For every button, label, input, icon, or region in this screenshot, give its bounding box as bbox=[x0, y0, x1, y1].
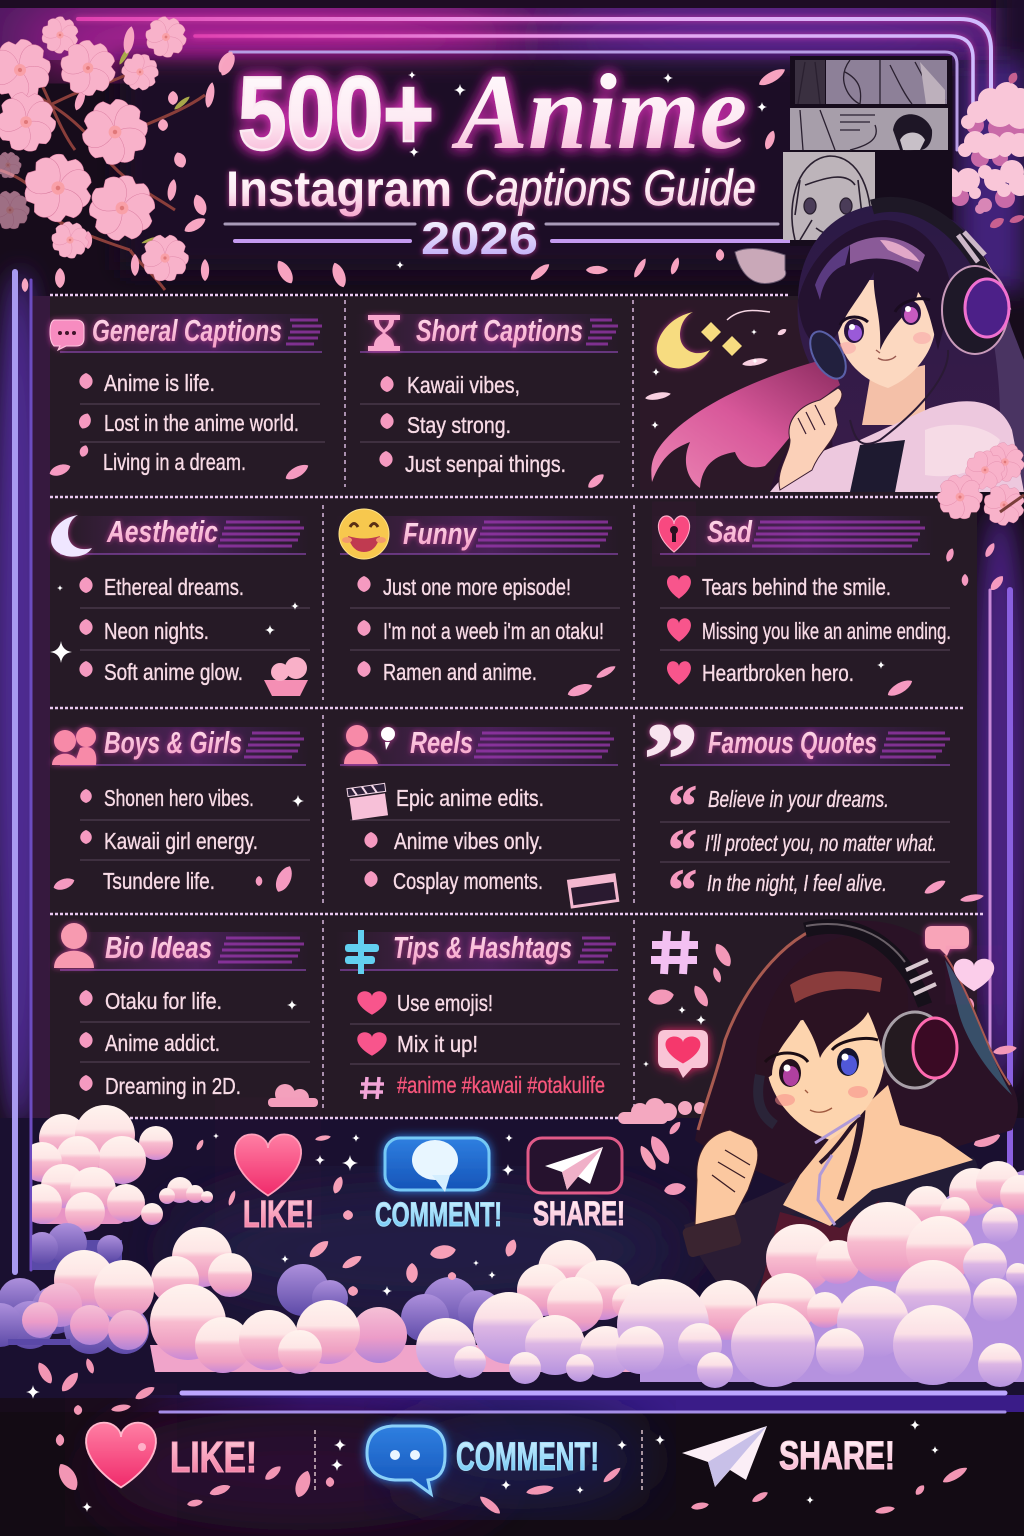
icon: speech bubble bbox=[50, 320, 84, 350]
panel: Aesthetic bbox=[50, 514, 308, 696]
icon: bowl bbox=[264, 657, 308, 696]
eyes bbox=[765, 1038, 878, 1112]
heading: Tips & Hashtags bbox=[393, 930, 572, 965]
caption: Soft anime glow. bbox=[104, 659, 243, 685]
caption: Kawaii vibes, bbox=[407, 372, 520, 398]
icon: person bbox=[54, 923, 94, 968]
panel: Reels bbox=[344, 725, 618, 907]
caption bbox=[667, 618, 951, 644]
caption: Neon nights. bbox=[104, 618, 209, 644]
caption with clapperboard bbox=[347, 783, 544, 820]
right domes bbox=[766, 1161, 1024, 1292]
pink chat bubble bbox=[925, 926, 969, 956]
caption bbox=[380, 412, 511, 438]
hashtags bbox=[360, 1072, 605, 1099]
share: SHARE! bbox=[779, 1434, 895, 1478]
heading: Bio Ideas bbox=[105, 930, 212, 965]
headset bbox=[803, 204, 1009, 444]
caption: Believe in your dreams. bbox=[708, 786, 889, 812]
title petals and stars bbox=[218, 52, 787, 289]
like: LIKE! bbox=[170, 1433, 257, 1482]
subtitle line: Instagram bbox=[226, 161, 452, 217]
caption: Kawaii girl energy. bbox=[104, 828, 258, 854]
pink cloudlet bbox=[618, 1098, 706, 1124]
petals among clouds bbox=[195, 1133, 659, 1296]
left frame clouds bbox=[22, 1105, 173, 1270]
comment bbox=[367, 1426, 599, 1494]
cherry blossom branch bbox=[0, 11, 237, 292]
pink flowing hair bbox=[651, 358, 840, 488]
bottom bar bbox=[26, 1357, 969, 1517]
caption: Cosplay moments. bbox=[393, 868, 543, 894]
caption: “ bbox=[668, 817, 697, 882]
neck and chest bbox=[783, 1085, 973, 1226]
heading: Boys & Girls bbox=[104, 725, 242, 760]
caption bbox=[668, 857, 887, 922]
bottom petals bbox=[26, 1357, 969, 1517]
moon and sparkles panel bbox=[645, 310, 788, 429]
icon: person and chat bbox=[344, 725, 395, 764]
like bbox=[86, 1423, 257, 1487]
icon: heart bbox=[235, 1134, 301, 1196]
girl with headphones, top right bbox=[651, 204, 1024, 492]
caption bbox=[357, 1031, 478, 1057]
caption bbox=[80, 785, 254, 811]
panel: General Captions bbox=[48, 313, 311, 483]
label: LIKE! bbox=[243, 1194, 314, 1236]
icon: hourglass bbox=[368, 315, 400, 351]
icon: film frame bbox=[569, 875, 618, 907]
glowing heart bbox=[954, 959, 994, 991]
caption bbox=[364, 868, 543, 894]
panel: Bio Ideas bbox=[54, 923, 318, 1107]
icon: smile emoji bbox=[339, 509, 389, 559]
caption: Just one more episode! bbox=[383, 574, 571, 600]
subtitle line: Captions Guide bbox=[465, 160, 756, 216]
heading: General Captions bbox=[92, 313, 282, 348]
caption: Lost in the anime world: Lost in the anime world. bbox=[104, 410, 299, 436]
caption: Ethereal dreams. bbox=[104, 574, 244, 600]
caption: Dreaming in 2D. bbox=[105, 1073, 241, 1099]
bangs bbox=[798, 220, 952, 350]
subtitle line bbox=[226, 160, 756, 217]
caption bbox=[79, 618, 209, 644]
floating petals bbox=[646, 941, 1018, 1197]
back clouds band bbox=[0, 1264, 502, 1354]
face bbox=[768, 1005, 885, 1140]
back hair bbox=[695, 921, 1018, 1190]
body bbox=[684, 1170, 880, 1300]
social row: comment bbox=[375, 1138, 502, 1234]
caption: Mix it up! bbox=[397, 1031, 478, 1057]
manga panels bbox=[783, 56, 952, 246]
icon: tip marker bbox=[345, 930, 379, 974]
panel: Famous Quotes bbox=[644, 703, 984, 922]
headset bbox=[758, 924, 957, 1125]
caption: “ bbox=[668, 857, 697, 922]
heading: Sad bbox=[707, 514, 753, 549]
caption bbox=[667, 574, 891, 600]
caption: Living in a dream bbox=[48, 444, 246, 478]
label: SHARE! bbox=[533, 1195, 625, 1233]
face bbox=[838, 280, 935, 388]
icon: broken heart bbox=[658, 516, 690, 552]
centre domes bbox=[517, 1240, 648, 1333]
icon: share button bbox=[528, 1138, 622, 1193]
bangs bbox=[756, 935, 908, 1085]
heart chat bubble bbox=[658, 1030, 708, 1078]
caption: Ramen and anime. bbox=[383, 659, 537, 685]
neck bbox=[862, 365, 925, 425]
caption with clapperboard: Epic anime edits. bbox=[396, 785, 544, 811]
blossoms beside Sad panel bbox=[935, 440, 1024, 593]
title line: 500+ Anime: Anime bbox=[451, 53, 747, 172]
heading: Famous Quotes bbox=[708, 725, 877, 760]
icon: quote marks: ” bbox=[644, 703, 698, 814]
caption: Use emojis! bbox=[397, 990, 493, 1016]
label: COMMENT! bbox=[375, 1196, 502, 1234]
title bbox=[226, 53, 756, 264]
caption: Anime is life: Anime is life. bbox=[104, 370, 215, 396]
social row: share bbox=[528, 1138, 625, 1233]
caption bbox=[79, 1030, 220, 1056]
heading: Aesthetic bbox=[106, 514, 218, 549]
caption: Stay strong. bbox=[407, 412, 511, 438]
panel: Boys & Girls bbox=[52, 725, 304, 894]
title line: 500+ Anime bbox=[238, 53, 747, 172]
jacket bbox=[770, 401, 1024, 492]
panel: Funny bbox=[339, 509, 617, 699]
grid dividers bbox=[50, 295, 985, 1118]
icon: comment button bbox=[385, 1138, 489, 1192]
caption bbox=[668, 817, 937, 882]
back hair bbox=[798, 205, 1024, 492]
title line: 500+ Anime: 500+ bbox=[238, 56, 434, 172]
icon: small cloud bbox=[268, 1084, 318, 1107]
icon: large hashtag bbox=[651, 931, 698, 974]
panel: Sad bbox=[658, 514, 951, 699]
caption: I'm not a weeb i'm an otaku! bbox=[383, 618, 604, 644]
icon: couple bbox=[52, 727, 96, 765]
caption bbox=[667, 660, 854, 686]
caption: Tsundere life. bbox=[103, 868, 215, 894]
panel: Tips & Hashtags bbox=[345, 930, 605, 1099]
heading bars bbox=[60, 314, 950, 970]
caption bbox=[52, 868, 215, 894]
social row: like bbox=[235, 1134, 314, 1236]
caption bbox=[668, 773, 889, 838]
caption: Tears behind the smile. bbox=[702, 574, 891, 600]
caption: Anime vibes only. bbox=[394, 828, 543, 854]
caption: In the night, I feel alive. bbox=[707, 870, 887, 896]
caption: Living in a dream: Living in a dream. bbox=[103, 449, 246, 475]
caption bbox=[357, 990, 493, 1016]
clouds bbox=[0, 1105, 1024, 1388]
icon: moon bbox=[51, 515, 92, 557]
caption: Anime addict. bbox=[105, 1030, 220, 1056]
left-centre domes bbox=[54, 1227, 252, 1320]
heading: Funny bbox=[403, 516, 477, 551]
eyes bbox=[840, 299, 930, 360]
girl with headphones, bottom right bbox=[618, 921, 1018, 1300]
heading: Reels bbox=[410, 725, 473, 760]
caption: Shonen hero vibes. bbox=[104, 785, 254, 811]
small cloud bbox=[159, 1177, 213, 1204]
caption: Heartbroken hero. bbox=[702, 660, 854, 686]
cloud bases bbox=[150, 1345, 640, 1372]
comment: COMMENT! bbox=[456, 1435, 599, 1479]
panel: Short Captions bbox=[368, 313, 606, 491]
caption: Just senpai things. bbox=[405, 451, 566, 477]
blossom tree, top right bbox=[926, 71, 1024, 231]
hashtags: #anime #kawaii #otakulife bbox=[397, 1072, 605, 1098]
hand bbox=[695, 1130, 758, 1225]
caption: “ bbox=[668, 773, 697, 838]
hand bbox=[779, 388, 842, 490]
heading: Short Captions bbox=[416, 313, 583, 348]
year: 2026 bbox=[421, 213, 538, 264]
caption: I'll protect you, no matter what. bbox=[705, 830, 937, 856]
share bbox=[682, 1426, 895, 1487]
caption: Otaku for life. bbox=[105, 988, 222, 1014]
